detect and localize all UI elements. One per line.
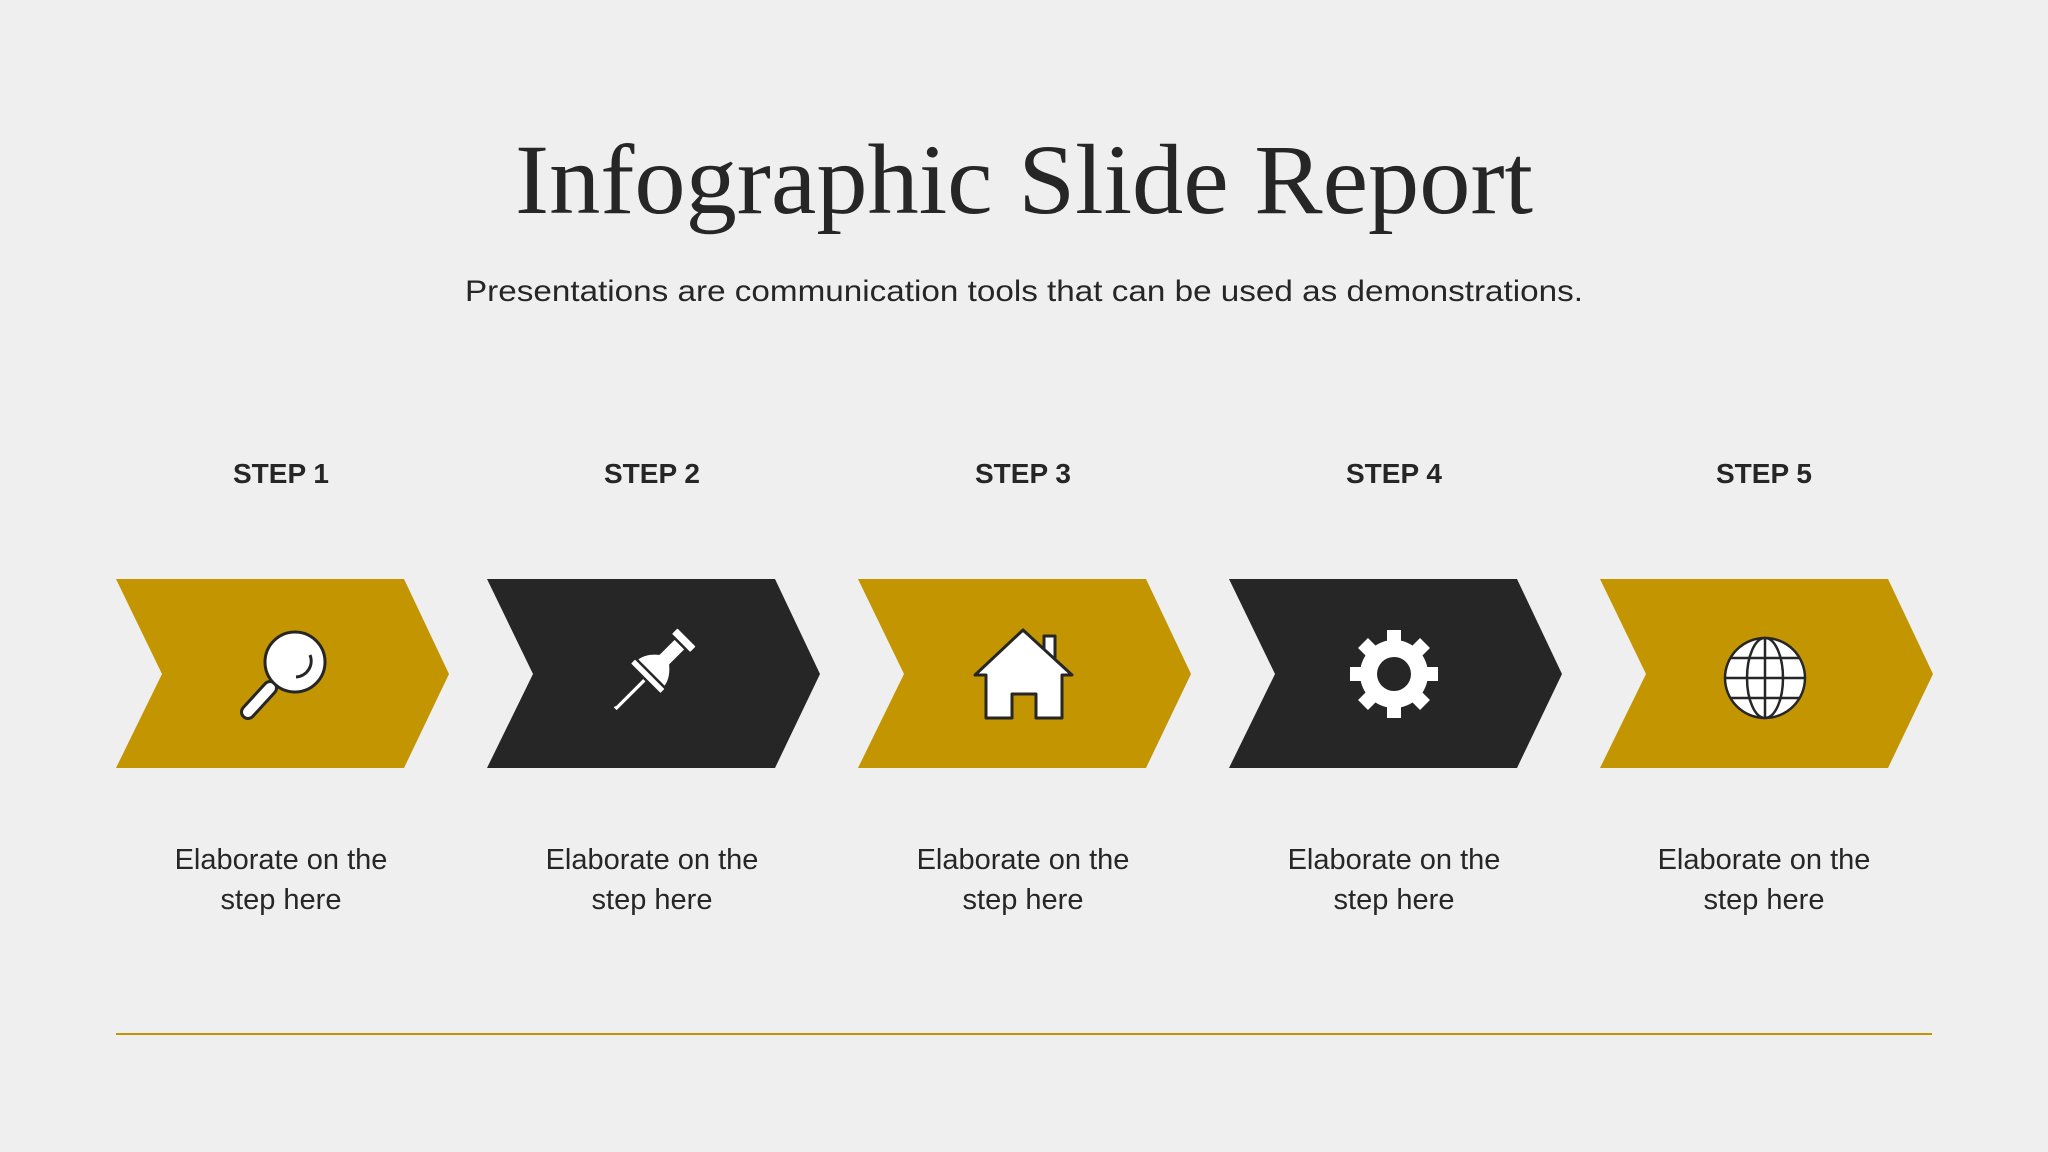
icon: pushpin <box>600 621 703 724</box>
icon: globe <box>1725 638 1805 718</box>
step 2 <box>487 458 820 916</box>
step 4: step here <box>1334 884 1454 916</box>
step 5 <box>1600 458 1933 916</box>
step 2 chevron <box>487 579 820 768</box>
step 3 label: STEP 3 <box>975 458 1071 489</box>
icon: house <box>975 630 1072 718</box>
subtitle: Presentations are communication tools that can be used as demonstrations. <box>465 275 1583 308</box>
step 1: step here <box>221 884 341 916</box>
step 3 chevron <box>858 579 1191 768</box>
step 5 text: Elaborate on the <box>1658 844 1870 876</box>
step 5 chevron <box>1600 579 1933 768</box>
step 5 label: STEP 5 <box>1716 458 1812 489</box>
step 1 label: STEP 1 <box>233 458 329 489</box>
step 2: step here <box>592 884 712 916</box>
step 1 chevron <box>116 579 449 768</box>
icon: magnifier <box>248 632 325 712</box>
step 3 <box>858 458 1191 916</box>
step 3: step here <box>963 884 1083 916</box>
step 4 text: Elaborate on the <box>1288 844 1500 876</box>
icon: gear <box>1350 630 1438 718</box>
step 1 <box>116 458 449 916</box>
step 1 text: Elaborate on the <box>175 844 387 876</box>
step 2 label: STEP 2 <box>604 458 700 489</box>
step 3 text: Elaborate on the <box>917 844 1129 876</box>
title: Infographic Slide Report <box>515 124 1533 235</box>
step 2 text: Elaborate on the <box>546 844 758 876</box>
step 4 label: STEP 4 <box>1346 458 1442 489</box>
step 4 chevron <box>1229 579 1562 768</box>
step 5: step here <box>1704 884 1824 916</box>
step 4 <box>1229 458 1562 916</box>
